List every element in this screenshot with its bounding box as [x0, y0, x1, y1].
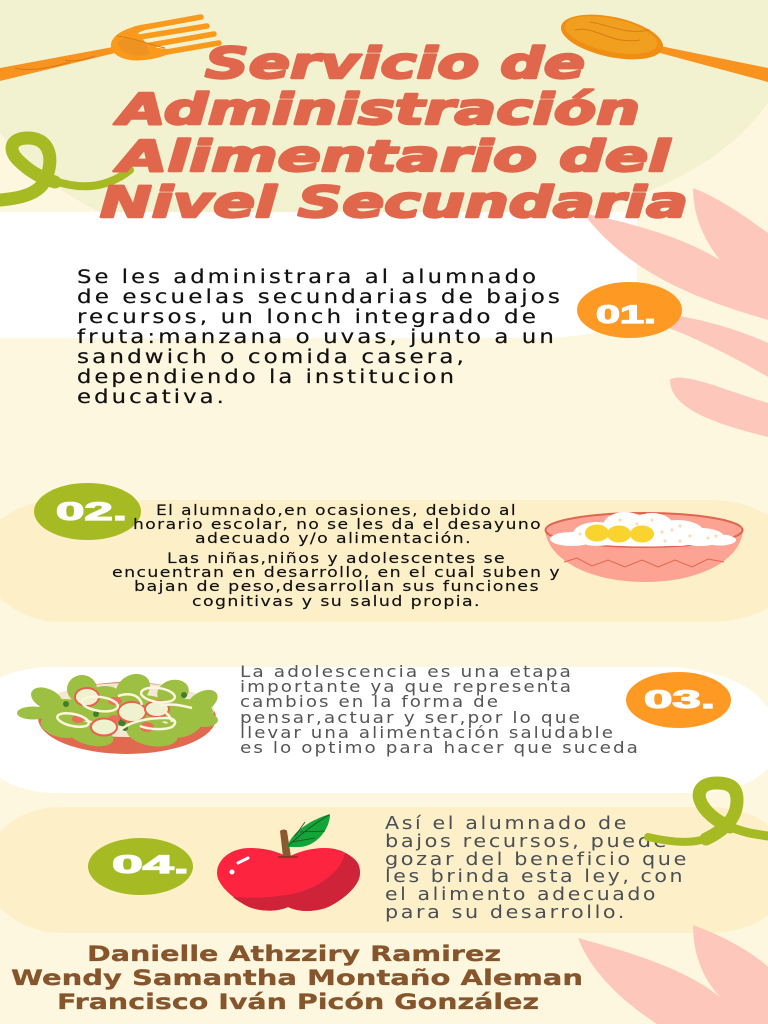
icon: salad plate	[17, 668, 222, 754]
icon: bowl of rice with banana	[545, 512, 743, 582]
text block: section 3: es lo optimo para hacer que suceda	[240, 738, 640, 757]
text block: section 1: recursos, un lonch integrado de	[77, 307, 539, 328]
text block: section 2: cognitivas y su salud propia.	[192, 594, 481, 610]
title	[100, 39, 688, 228]
text block: section 4: Así el alumnado de	[385, 814, 629, 834]
text block: section 3: cambios en la forma de	[240, 692, 500, 711]
panel: section 4 background	[0, 807, 768, 933]
title: Administración	[114, 85, 640, 135]
panel: section 1 background	[0, 212, 637, 338]
authors: Francisco Iván Picón González	[57, 990, 539, 1015]
text block: section 1: fruta:manzana o uvas, junto a un	[77, 327, 557, 348]
panel: section 2 background	[0, 500, 768, 622]
title: Alimentario del	[114, 132, 672, 182]
text block: section 3: llevar una alimentación saludable	[240, 723, 615, 742]
text block: section 1: educativa.	[77, 387, 227, 408]
title: Servicio de	[205, 39, 585, 89]
badge 01	[577, 282, 682, 338]
text block: section 2: encuentran en desarrollo, en el cual suben y	[112, 565, 561, 581]
text block: section 2: Las niñas,niños y adolescentes se	[167, 551, 506, 567]
panel: section 3 background	[0, 667, 768, 793]
text block: section 1: dependiendo la institucion	[77, 367, 457, 388]
text block: section 1: de escuelas secundarias de bajos	[77, 287, 563, 308]
authors: Danielle Athzziry Ramirez	[87, 942, 501, 967]
badge 02: 02.	[56, 498, 127, 526]
text block: section 2: bajan de peso,desarrollan sus funciones	[134, 579, 540, 595]
text block: section 3: pensar,actuar y ser,por lo que	[240, 708, 582, 727]
icon: red apple	[217, 814, 360, 911]
text block: section 4: bajos recursos, puede	[385, 832, 669, 852]
authors: Wendy Samantha Montaño Aleman	[11, 966, 583, 991]
icon: green ribbon top left	[0, 138, 130, 200]
badge 02	[34, 483, 141, 540]
authors	[11, 942, 583, 1015]
header background shape	[0, 0, 768, 212]
text block: section 2: El alumnado,en ocasiones, debido al	[156, 503, 517, 519]
badge 01: 01.	[596, 301, 656, 329]
icon: fork	[0, 17, 219, 81]
text block: section 4: les brinda esta ley, con	[385, 867, 685, 887]
text block: section 2	[112, 503, 561, 610]
decorative pink leaves top	[583, 188, 768, 437]
text block: section 4: para su desarrollo.	[385, 903, 627, 923]
text block: section 4: el alimento adecuado	[385, 885, 658, 905]
text block: section 4	[385, 814, 689, 923]
text block: section 1: sandwich o comida casera,	[77, 347, 467, 368]
text block: section 2: adecuado y/o alimentación.	[195, 531, 472, 547]
title: Nivel Secundaria	[100, 178, 688, 228]
badge 03	[626, 672, 731, 728]
icon: wooden spoon	[557, 7, 768, 82]
text block: section 1: Se les administrara al alumnado	[77, 267, 539, 288]
text block: section 3: importante ya que representa	[240, 677, 573, 696]
text block: section 3	[240, 662, 640, 757]
text block: section 2: horario escolar, no se les da el desayuno	[133, 517, 542, 533]
decorative pink leaves bottom	[578, 925, 768, 1024]
icon: green ribbon right	[648, 783, 768, 842]
text block: section 1	[77, 267, 563, 408]
text block: section 3: La adolescencia es una etapa	[240, 662, 573, 681]
text block: section 4: gozar del beneficio que	[385, 850, 689, 870]
badge 04: 04.	[112, 851, 189, 879]
badge 04	[88, 838, 193, 895]
badge 03: 03.	[644, 686, 715, 714]
